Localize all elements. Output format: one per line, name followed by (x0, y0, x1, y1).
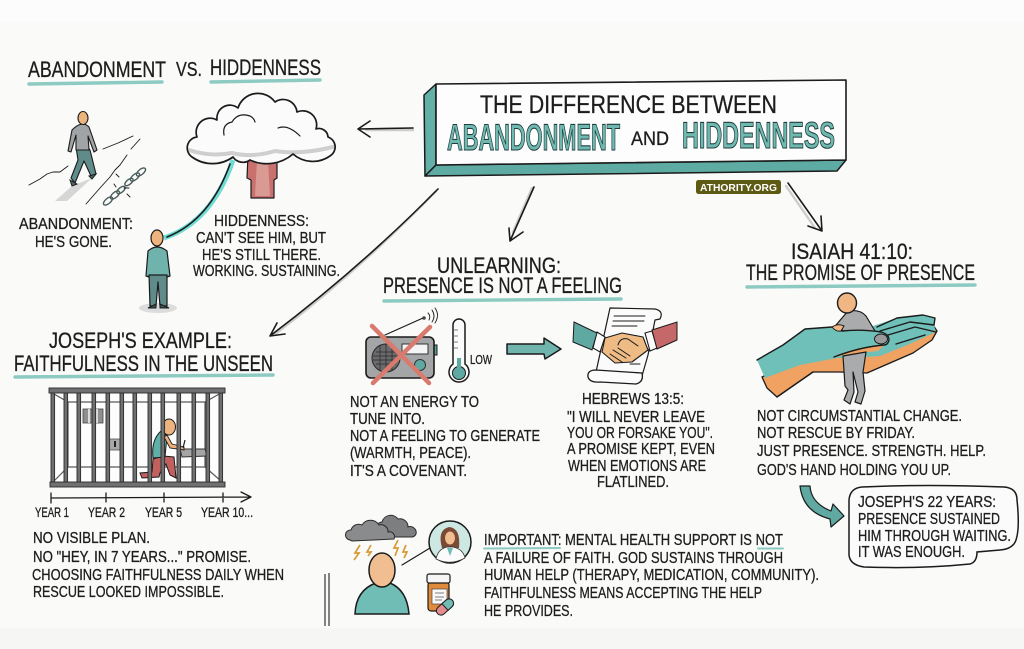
label: hiddenness: HE'S STILL THERE. (202, 247, 321, 264)
text: not circumstantial change: GOD'S HAND HOLDING YOU UP. (757, 462, 951, 479)
icon: cloud hiding figure (187, 93, 335, 198)
text: not circumstantial change (757, 408, 986, 479)
arrow: title to Joseph (270, 189, 438, 336)
icon: walking figure on cracked ground (29, 112, 140, 204)
text: Hebrews 13:5: HEBREWS 13:5: (582, 391, 684, 408)
text: not an energy: NOT AN ENERGY TO (350, 394, 479, 411)
title banner: HIDDENNESS (682, 115, 835, 156)
panel: unlearning (350, 253, 715, 491)
text: not an energy: IT'S A COVENANT. (350, 463, 467, 480)
text: not circumstantial change: NOT CIRCUMSTANTIAL CHANGE. (757, 408, 962, 425)
source badge: ATHORITY.ORG (700, 182, 777, 194)
text: important note (484, 532, 819, 620)
text: Joseph's faithfulness: NO VISIBLE PLAN. (33, 530, 150, 547)
heading: Isaiah (746, 239, 975, 287)
heading: Isaiah: ISAIAH 41:10: (791, 239, 913, 264)
icon: doctor thought bubble (402, 521, 471, 565)
text: not an energy: NOT A FEELING TO GENERATE (350, 428, 540, 445)
divider bars (325, 573, 329, 626)
timeline: YEAR 10... (201, 505, 253, 520)
heading: unlearning (383, 253, 622, 301)
heading: abandonment vs hiddenness (28, 55, 321, 84)
label: abandonment: ABANDONMENT: (19, 216, 133, 233)
text: Hebrews 13:5: YOU OR FORSAKE YOU". (567, 425, 713, 442)
text: important note: A FAILURE OF FAITH. GOD SUSTAINS THROUGH (484, 550, 783, 567)
heading: Joseph's example (14, 328, 273, 377)
text: Hebrews 13:5 (567, 391, 715, 491)
timeline: YEAR 2 (88, 505, 125, 520)
heading: Joseph's example: FAITHFULNESS IN THE UNSEEN (14, 351, 273, 376)
title banner: AND (631, 129, 669, 150)
panel: abandonment vs hiddenness (19, 55, 340, 313)
heading: abandonment vs hiddenness: ABANDONMENT (28, 57, 166, 82)
arrow: title to Isaiah (786, 183, 822, 231)
callout: Joseph's 22 years (849, 486, 1018, 568)
icon: low thermometer: LOW (470, 352, 493, 367)
icon: prison cell with figure (49, 388, 225, 487)
text: not an energy (350, 394, 540, 480)
icon: broken chain (102, 166, 147, 207)
heading: unlearning: PRESENCE IS NOT A FEELING (383, 273, 622, 298)
timeline: YEAR 5 (145, 505, 182, 520)
timeline: YEAR 1 (35, 505, 69, 520)
label: abandonment: HE'S GONE. (35, 234, 112, 251)
text: important note: HUMAN HELP (THERAPY, MEDICATION, COMMUNITY). (484, 567, 819, 584)
icon: line of sight (164, 160, 233, 238)
text: important note: FAITHFULNESS MEANS ACCEPTING THE HELP (484, 585, 762, 602)
icon: scroll and handshake (573, 308, 677, 384)
panel: Isaiah 41:10 (746, 239, 1018, 568)
heading: Joseph's example: JOSEPH'S EXAMPLE: (49, 328, 232, 353)
text: Hebrews 13:5: A PROMISE KEPT, EVEN (567, 441, 715, 458)
icon: storm clouds over person (345, 515, 416, 614)
label: hiddenness: WORKING. SUSTAINING. (193, 263, 340, 280)
label: hiddenness (193, 213, 340, 280)
text: Joseph's faithfulness: RESCUE LOOKED IMPOSSIBLE. (33, 584, 224, 601)
label: hiddenness: HIDDENNESS: (214, 213, 309, 230)
text: Joseph's faithfulness: CHOOSING FAITHFULNESS DAILY WHEN (32, 567, 284, 584)
text: Joseph's faithfulness: NO "HEY, IN 7 YEARS..." PROMISE. (33, 549, 251, 566)
callout: Joseph's 22 years: IT WAS ENOUGH. (858, 544, 965, 561)
text: Joseph's faithfulness (32, 530, 284, 601)
arrow: title to unlearning (509, 187, 534, 241)
heading: abandonment vs hiddenness: HIDDENNESS (210, 55, 321, 80)
heading: unlearning: UNLEARNING: (437, 253, 561, 278)
arrow: curved to bubble (800, 486, 844, 527)
title banner (424, 80, 846, 176)
panel: mental health note (325, 515, 819, 626)
panel: Joseph's example (14, 328, 284, 601)
title banner: ABANDONMENT (447, 117, 620, 158)
text: Hebrews 13:5: FLATLINED. (597, 474, 669, 491)
icon: crossed-out radio (366, 308, 438, 383)
icon: low thermometer (449, 319, 493, 382)
title banner: THE DIFFERENCE BETWEEN (480, 91, 777, 119)
text: important note: HE PROVIDES. (484, 603, 573, 620)
timeline (35, 492, 253, 520)
icon: medicine bottle and capsule (427, 574, 455, 617)
text: not an energy: TUNE INTO. (350, 411, 425, 428)
label: abandonment (19, 216, 133, 251)
arrow: radio to covenant (507, 338, 561, 359)
arrow: title to cloud (358, 121, 413, 137)
text: not an energy: (WARMTH, PEACE). (350, 445, 471, 462)
heading: abandonment vs hiddenness: VS. (176, 59, 202, 81)
icon: standing figure (139, 230, 177, 313)
text: Hebrews 13:5: WHEN EMOTIONS ARE (568, 458, 706, 475)
text: Hebrews 13:5: "I WILL NEVER LEAVE (567, 409, 705, 426)
text: not circumstantial change: NOT RESCUE BY FRIDAY. (757, 425, 915, 442)
icon: figure held in a hand (757, 293, 937, 404)
callout: Joseph's 22 years: JOSEPH'S 22 YEARS: (858, 494, 996, 511)
text: important note: IMPORTANT: MENTAL HEALTH SUPPORT IS NOT (484, 532, 783, 549)
label: hiddenness: CAN'T SEE HIM, BUT (196, 230, 326, 247)
